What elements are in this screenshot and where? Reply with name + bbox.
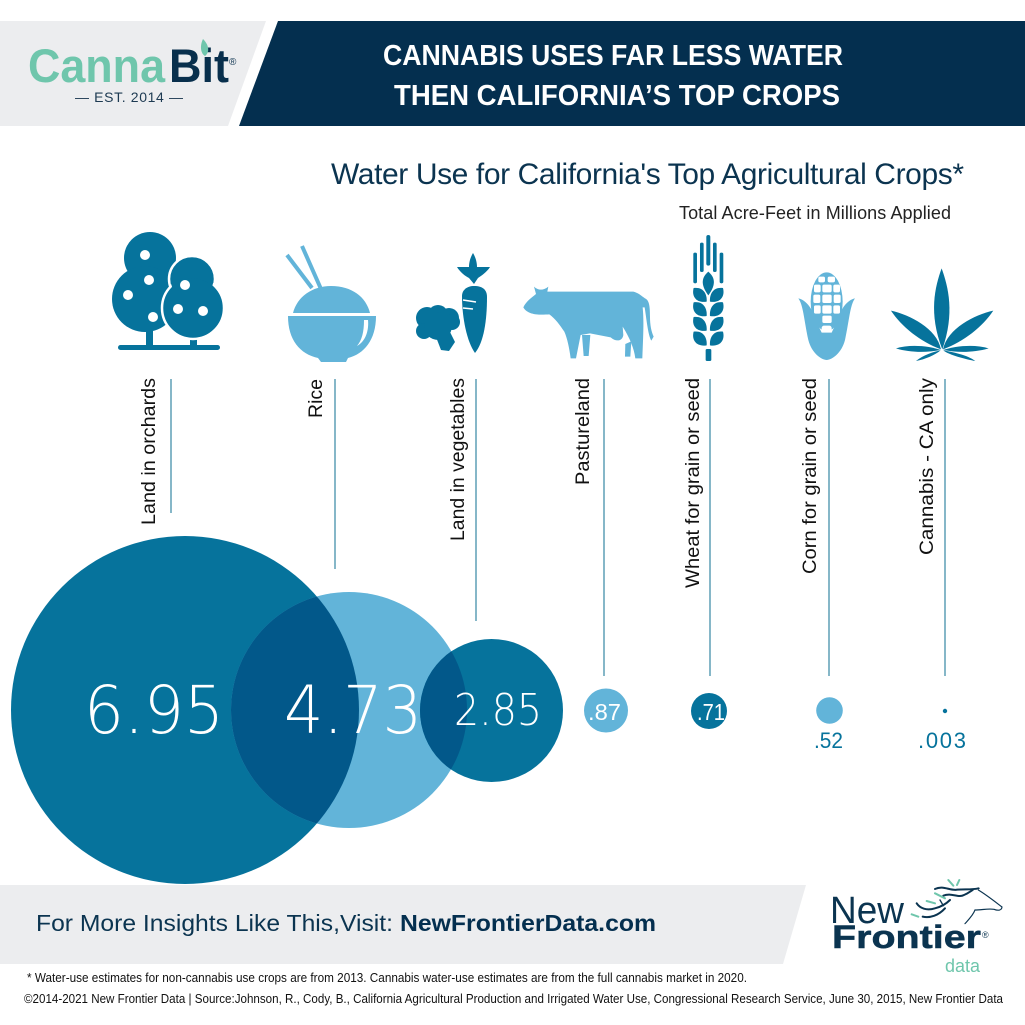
value: .003: .003 [918,728,966,753]
overlap: orchards and rice [231,596,359,824]
bubble: wheat [691,693,727,729]
icon: rice bowl [287,246,376,362]
value: 4.73: 4.73 [284,672,422,749]
label: Wheat for grain or seed: Wheat for grain or seed [683,378,704,588]
footer link: NewFrontierData.com [400,910,656,936]
logo: CannaBit: ® [229,57,237,68]
value: 2.85: 2.85 [454,685,542,736]
bubble: corn [816,697,843,724]
icon: carrot and broccoli [416,253,490,353]
logo panel [0,21,266,126]
label: Rice: Rice [306,379,327,418]
footnote: * Water-use estimates for non-cannabis use crops are from 2013. Cannabis water-use estimates are from the full cannabis market in 2020. [27,971,747,985]
icon: cow [523,287,654,358]
value: .71: .71 [697,699,725,725]
bubble chart [11,536,966,884]
logo: New Frontier Data: Frontier [832,919,981,955]
title [383,40,843,112]
logo: New Frontier Data: New [830,890,905,932]
logo: New Frontier Data: data [945,956,981,976]
label: Cannabis - CA only: Cannabis - CA only [917,377,938,555]
bubble: pastureland [584,688,628,732]
logo: CannaBit: — EST. 2014 — [75,89,183,105]
label: Pastureland: Pastureland [573,378,594,485]
icon: corn [798,272,855,360]
icon: cannabis leaf [891,268,993,361]
label: Land in orchards: Land in orchards [139,378,160,525]
overlap: rice and vegetables [420,651,467,770]
header band [0,21,1025,126]
logo: CannaBit: Canna [28,39,166,92]
footer panel [0,885,806,964]
chart heading: Water Use for California's Top Agricultural Crops* [331,158,964,191]
logo: CannaBit: Bit [169,39,229,92]
chart subheading: Total Acre-Feet in Millions Applied [679,203,951,223]
bubble: vegetables [420,639,563,782]
title panel [239,21,1025,126]
title: THEN CALIFORNIA’S TOP CROPS [394,80,840,112]
bubble: orchards [11,536,359,884]
icon: orchard trees [112,232,224,350]
icon: wheat [693,235,724,361]
logo: CannaBit [28,39,237,105]
icon: horse [912,880,1002,924]
title: CANNABIS USES FAR LESS WATER [383,40,843,72]
value: .87: .87 [588,699,621,725]
label: Corn for grain or seed: Corn for grain or seed [800,378,821,574]
logo: New Frontier Data [830,880,1002,976]
label: Land in vegetables: Land in vegetables [448,378,469,541]
footer call to action [0,885,806,964]
footer text: For More Insights Like This,Visit: [36,910,393,936]
value: .52: .52 [814,728,843,753]
bubble: rice [231,592,467,828]
value: 6.95: 6.95 [84,672,224,749]
bubble: cannabis [943,709,947,713]
logo: New Frontier Data: ® [982,930,989,940]
